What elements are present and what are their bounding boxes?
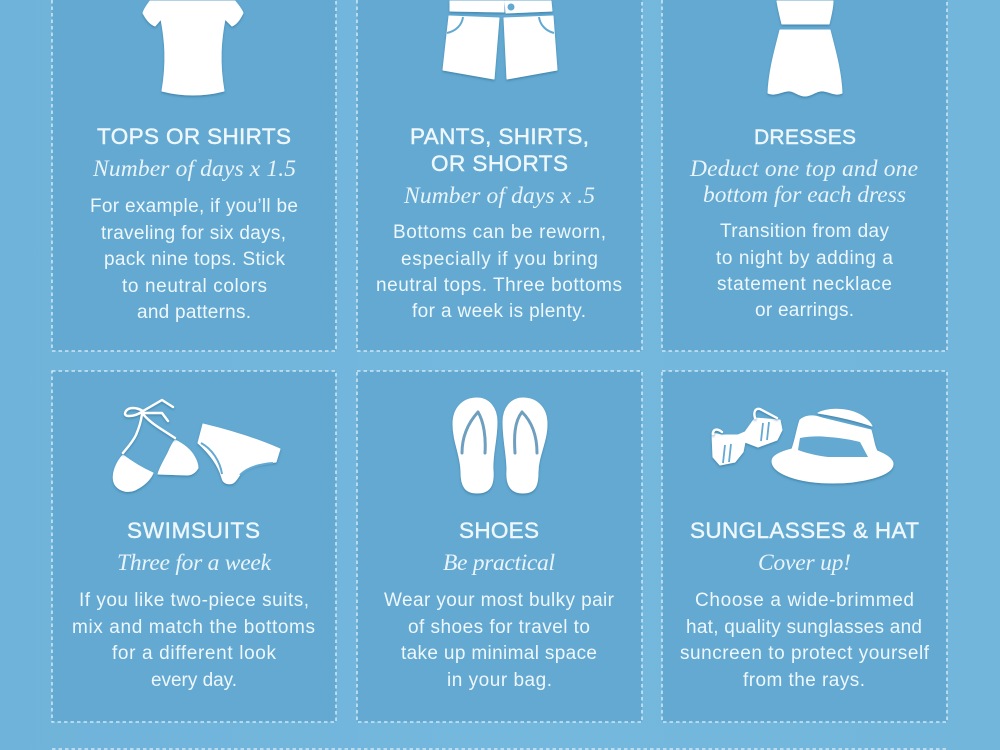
body text: or earrings.: [755, 300, 854, 321]
body text: Transition from day: [720, 221, 890, 242]
body text: for a week is plenty.: [412, 301, 586, 322]
icon: flip-flops: [453, 398, 547, 493]
body text: For example, if you’ll be: [90, 196, 298, 217]
body text: every day.: [151, 670, 237, 691]
body text: If you like two-piece suits,: [79, 590, 309, 611]
icon: shorts: [443, 1, 557, 79]
body text: Wear your most bulky pair: [384, 590, 615, 611]
subheading: [689, 156, 918, 208]
panel: sunglasses and hat: [662, 371, 947, 722]
subheading: Be practical: [443, 550, 555, 576]
body text: [376, 222, 622, 322]
body text: [90, 196, 298, 323]
subheading: Number of days x .5: [403, 183, 595, 209]
icon: bikini: [113, 400, 280, 491]
body text: pack nine tops. Stick: [104, 249, 286, 270]
body text: from the rays.: [743, 670, 865, 691]
icon: t-shirt: [143, 1, 243, 95]
subheading: Number of days x 1.5: [92, 156, 296, 182]
body text: [384, 590, 615, 691]
body text: for a different look: [112, 643, 276, 664]
body text: [72, 590, 315, 691]
heading: SHOES: [459, 518, 539, 543]
body text: and patterns.: [137, 302, 251, 323]
subheading: Cover up!: [758, 550, 851, 576]
icon: dress: [768, 1, 842, 96]
subheading: bottom for each dress: [703, 182, 906, 208]
heading: DRESSES: [754, 126, 856, 149]
subheading: Three for a week: [117, 550, 272, 576]
body text: to neutral colors: [122, 276, 267, 297]
icon: hat: [772, 409, 893, 483]
body text: mix and match the bottoms: [72, 617, 315, 638]
panel: swimsuits: [52, 371, 336, 722]
body text: suncreen to protect yourself: [680, 643, 930, 664]
body text: especially if you bring: [401, 249, 598, 270]
heading: TOPS OR SHIRTS: [97, 124, 291, 149]
panel: bottom strip: [52, 748, 947, 750]
body text: statement necklace: [717, 274, 892, 295]
body text: [680, 590, 930, 691]
body text: in your bag.: [447, 670, 552, 691]
body text: neutral tops. Three bottoms: [376, 275, 622, 296]
panel: pants, shirts, or shorts: [357, 0, 642, 351]
panel: tops or shirts: [52, 0, 336, 351]
body text: to night by adding a: [716, 248, 893, 269]
panel: pants, shirts, or shorts: OR SHORTS: [431, 151, 568, 176]
body text: Choose a wide-brimmed: [695, 590, 914, 611]
heading: SUNGLASSES & HAT: [690, 518, 919, 543]
body text: [716, 221, 893, 321]
body text: of shoes for travel to: [408, 617, 590, 638]
body text: hat, quality sunglasses and: [686, 617, 922, 638]
heading: SWIMSUITS: [127, 518, 260, 543]
subheading: Deduct one top and one: [689, 156, 918, 182]
body text: take up minimal space: [401, 643, 597, 664]
body text: Bottoms can be reworn,: [393, 222, 606, 243]
body text: traveling for six days,: [101, 223, 286, 244]
icon: sunglasses: [712, 409, 782, 465]
panel: shoes: [357, 371, 642, 722]
panel: dresses: [662, 0, 947, 351]
heading: PANTS, SHIRTS,: [410, 124, 589, 149]
